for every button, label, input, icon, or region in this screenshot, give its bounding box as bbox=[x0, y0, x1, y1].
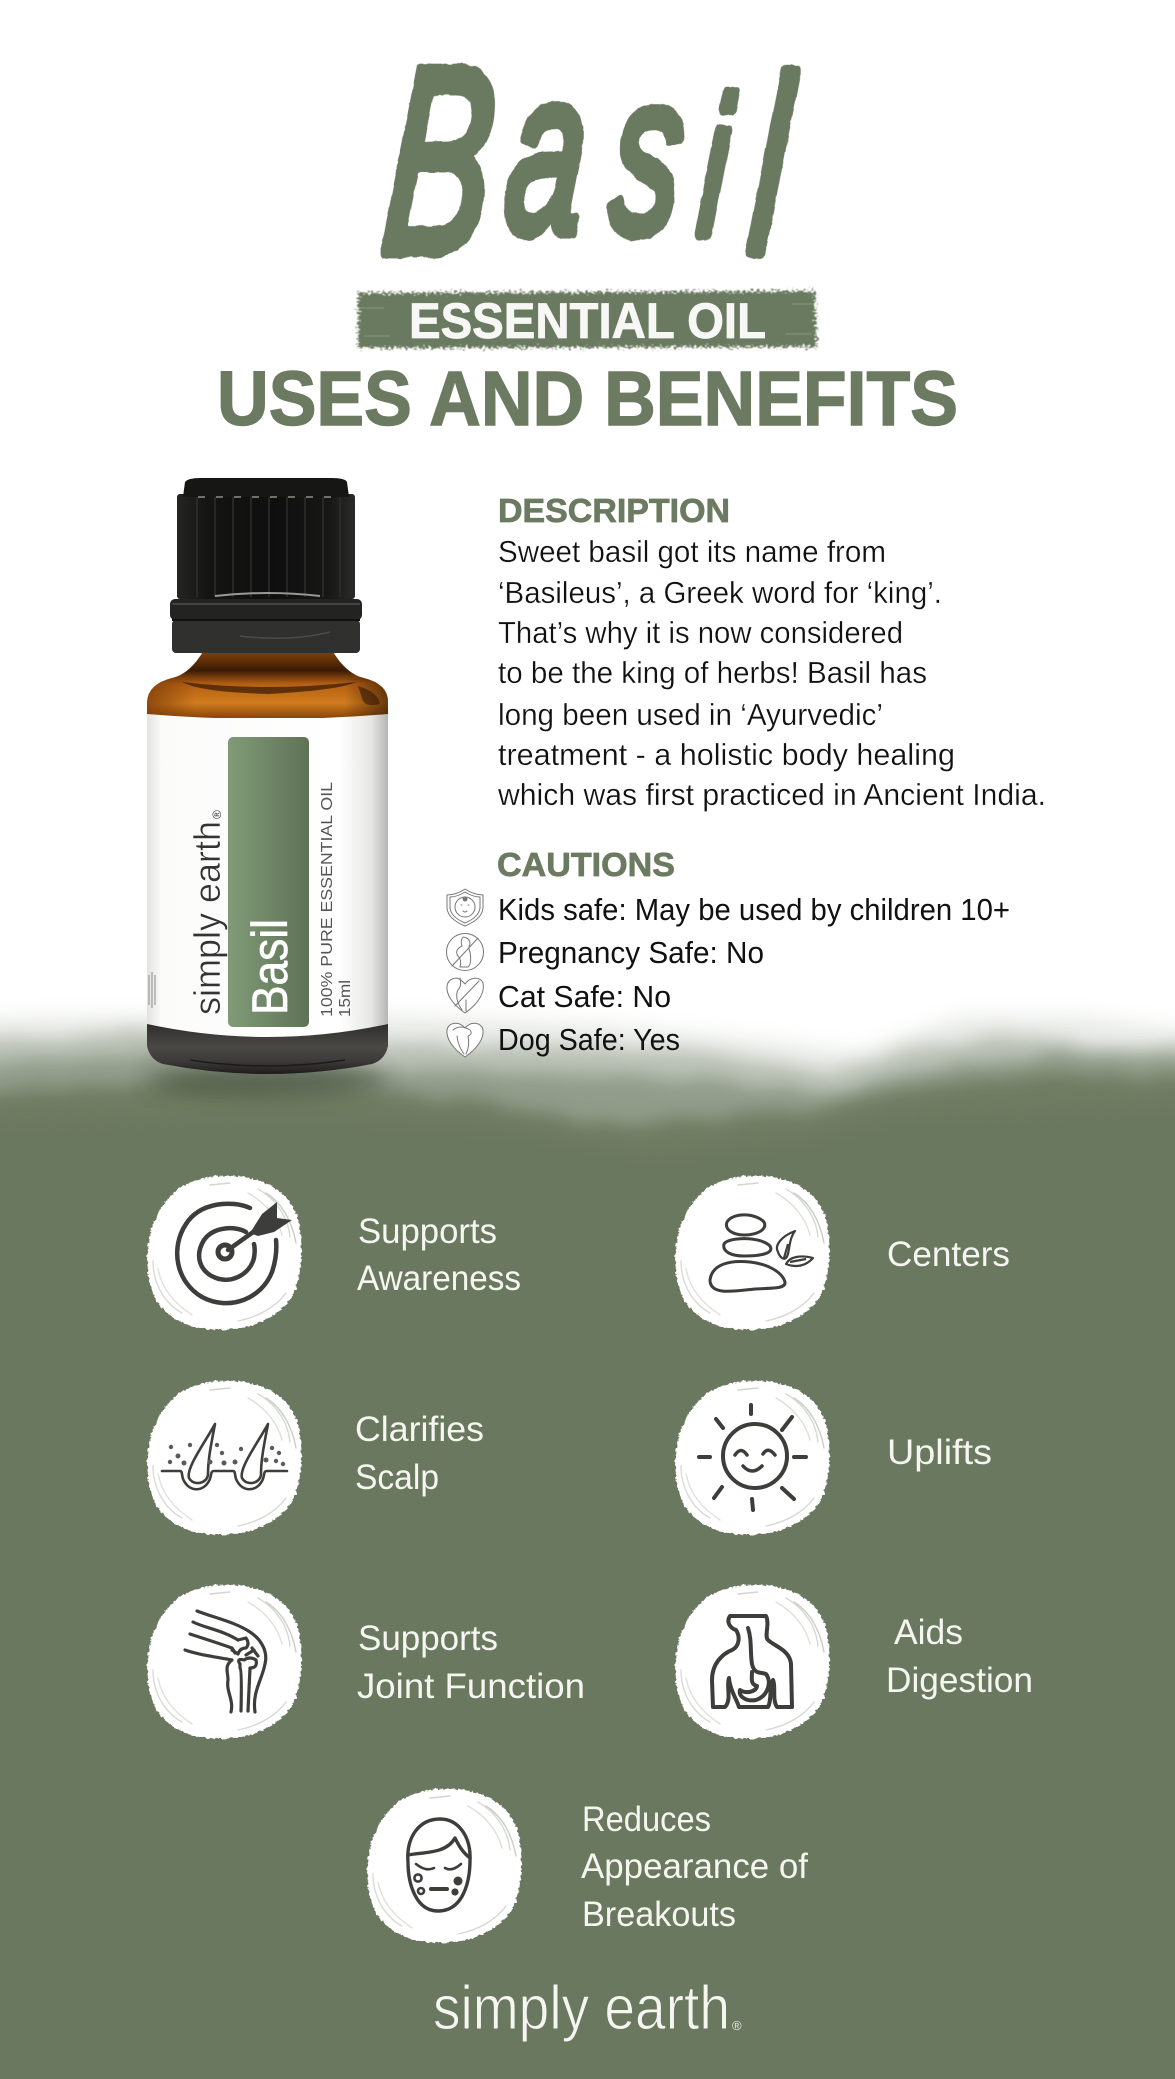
icon: pregnancy crossed out bbox=[446, 934, 484, 970]
benefit: Supports Awareness bbox=[147, 1176, 521, 1330]
icon: dog heart bbox=[447, 1023, 483, 1057]
description text block: which was first practiced in Ancient India. bbox=[497, 777, 1046, 812]
icon: stacked stones with leaves bbox=[675, 1176, 830, 1330]
description text block: long been used in ‘Ayurvedic’ bbox=[498, 697, 883, 732]
text: Clarifies Scalp: Scalp bbox=[355, 1458, 439, 1497]
text: Clarifies Scalp: Clarifies bbox=[355, 1410, 484, 1449]
description text block: to be the king of herbs! Basil has bbox=[498, 655, 927, 690]
text: Aids Digestion: Aids bbox=[894, 1613, 963, 1652]
text: Supports Awareness: Awareness bbox=[357, 1259, 521, 1298]
icon: knee joint bbox=[147, 1585, 302, 1739]
caution: pregnancy safe: Pregnancy Safe: No bbox=[498, 935, 764, 970]
text: Supports Awareness bbox=[357, 1212, 521, 1298]
text: Clarifies Scalp bbox=[355, 1410, 484, 1497]
benefit: Supports Joint Function bbox=[147, 1585, 585, 1739]
label: simply earth brand: simply earth bbox=[187, 821, 228, 1015]
icon: smiling sun bbox=[675, 1381, 830, 1535]
icon: face with breakouts bbox=[367, 1789, 522, 1943]
title: Basil: B bbox=[375, 14, 504, 309]
banner: brush stroke with Essential Oil: ESSENTIAL OIL bbox=[409, 293, 766, 349]
description text block: Sweet basil got its name from bbox=[498, 534, 886, 569]
text: Reduces Appearance of Breakouts bbox=[581, 1800, 808, 1934]
icon: cat heart crossed out bbox=[447, 978, 483, 1013]
text: Reduces Appearance of Breakouts: Reduces bbox=[582, 1800, 711, 1839]
heading: Uses and Benefits: USES AND BENEFITS bbox=[217, 356, 958, 442]
logo: simply earth: simply earth bbox=[433, 1974, 730, 2043]
text: Supports Joint Function: Supports bbox=[358, 1619, 498, 1658]
icon: target with arrow bbox=[147, 1176, 302, 1330]
description text block: treatment - a holistic body healing bbox=[498, 737, 955, 772]
description text block bbox=[497, 534, 1046, 812]
benefit: Aids Digestion bbox=[675, 1585, 1033, 1739]
text: Reduces Appearance of Breakouts: Appearance of bbox=[581, 1847, 808, 1886]
title: Basil: l bbox=[742, 26, 802, 305]
title: Basil: i bbox=[693, 59, 739, 276]
text: Supports Joint Function: Joint Function bbox=[357, 1667, 585, 1706]
benefit: Reduces Appearance of Breakouts bbox=[367, 1789, 808, 1943]
benefit: Centers bbox=[675, 1176, 1010, 1330]
icon: torso and stomach bbox=[675, 1585, 830, 1739]
benefit: Clarifies Scalp bbox=[147, 1381, 484, 1535]
text: Supports Awareness: Supports bbox=[358, 1212, 497, 1251]
heading: Cautions: CAUTIONS bbox=[497, 846, 675, 883]
green background panel bbox=[0, 1016, 1175, 2079]
logo: simply earth: ® bbox=[732, 2018, 742, 2033]
title: Basil: a bbox=[498, 21, 596, 282]
caution: kids safe: Kids safe: May be used by children 10+ bbox=[498, 892, 1010, 927]
label: fine print bbox=[149, 972, 155, 1008]
title: Basil: s bbox=[604, 25, 693, 280]
caution: dog safe: Dog Safe: Yes bbox=[498, 1022, 680, 1057]
label: Basil: Basil bbox=[242, 919, 298, 1015]
label: registered mark: ® bbox=[210, 810, 224, 819]
text: Aids Digestion: Digestion bbox=[886, 1661, 1033, 1700]
text: Aids Digestion bbox=[886, 1613, 1033, 1700]
icon: kid shield bbox=[447, 889, 483, 926]
text: Reduces Appearance of Breakouts: Breakouts bbox=[582, 1895, 736, 1934]
product bottle bbox=[146, 478, 390, 1094]
description text block: That’s why it is now considered bbox=[498, 615, 903, 650]
caution: cat safe: Cat Safe: No bbox=[498, 979, 671, 1014]
description text block: ‘Basileus’, a Greek word for ‘king’. bbox=[498, 575, 942, 610]
text: Centers: Centers bbox=[887, 1235, 1010, 1274]
icon: hair follicles bbox=[147, 1381, 302, 1535]
label: volume: 15ml bbox=[337, 980, 354, 1017]
heading: Description: DESCRIPTION bbox=[498, 492, 730, 529]
label: green name panel bbox=[228, 737, 309, 1027]
benefit: Uplifts bbox=[675, 1381, 992, 1535]
text: Supports Joint Function bbox=[357, 1619, 585, 1706]
text: Uplifts: Uplifts bbox=[887, 1433, 992, 1472]
label: 100% pure essential oil: 100% PURE ESSENTIAL OIL bbox=[319, 782, 336, 1017]
